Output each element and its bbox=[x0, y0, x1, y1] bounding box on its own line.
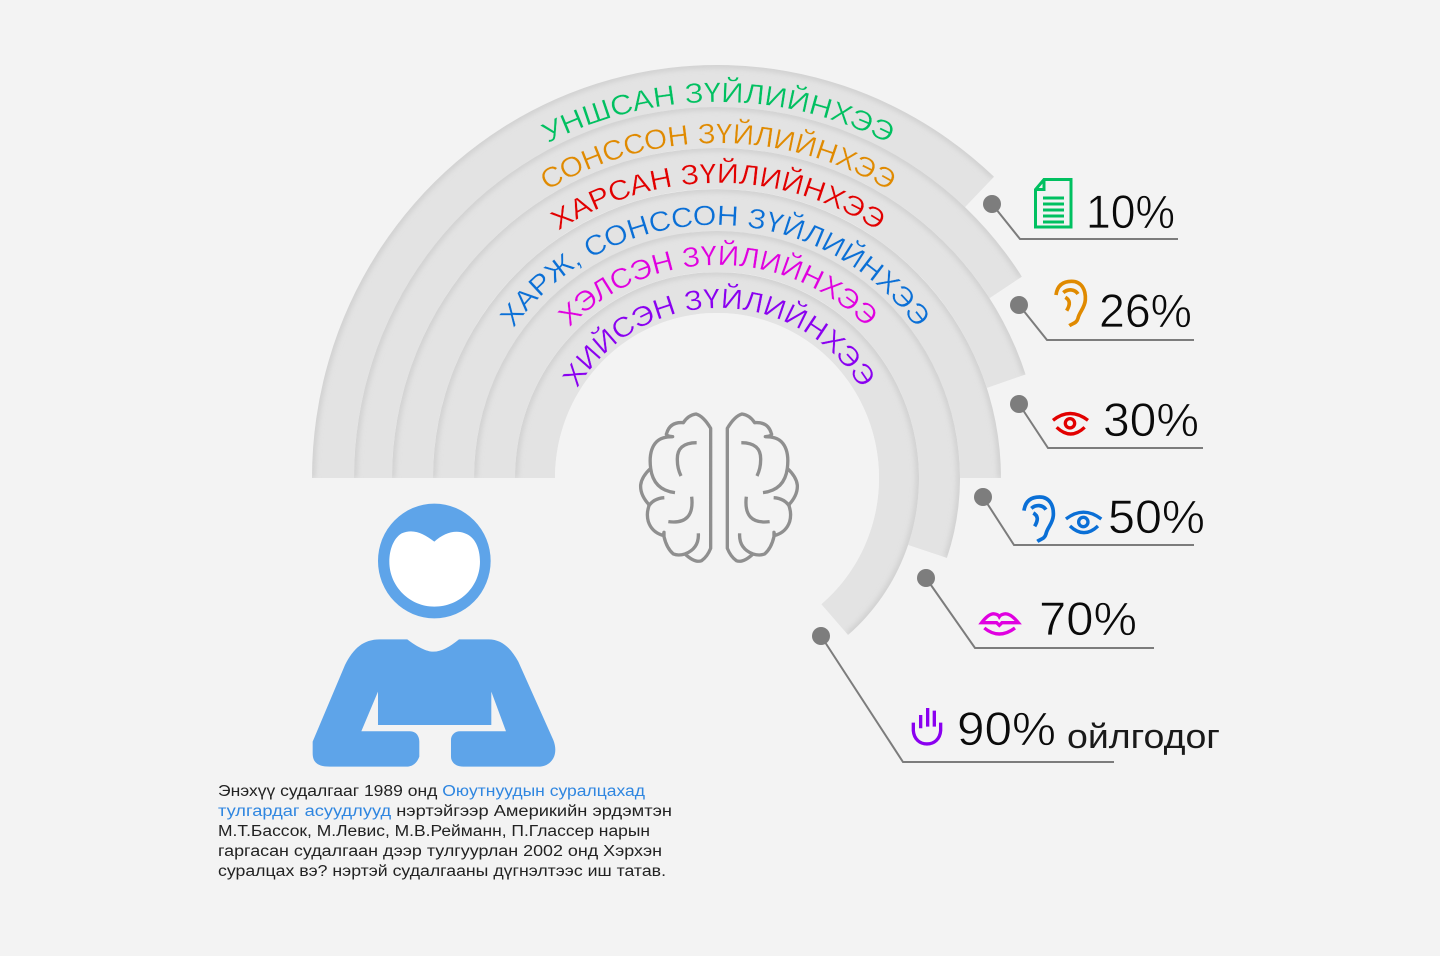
icon: hand bbox=[913, 708, 941, 744]
source paragraph: тулгардаг асуудлууд нэртэйгээр Америкийн эрдэмтэн bbox=[218, 803, 672, 820]
source paragraph: М.Т.Бассок, М.Левис, М.В.Рейманн, П.Глассер нарын bbox=[218, 823, 650, 840]
icon: brain bbox=[641, 414, 797, 561]
value: 30% bbox=[1103, 393, 1199, 446]
callout: 90% done bbox=[812, 627, 1220, 762]
band: seen and heard 50% bbox=[433, 189, 1001, 478]
label: said: ХЭЛСЭН ЗҮЙЛИЙНХЭЭ bbox=[557, 240, 876, 327]
marker dot bbox=[917, 569, 935, 587]
source paragraph: гаргасан судалгаан дээр тулгуурлан 2002 онд Хэрхэн bbox=[218, 843, 662, 860]
icon: eye bbox=[1066, 512, 1101, 533]
callout: 30% seen bbox=[1010, 393, 1203, 448]
face bbox=[389, 531, 480, 607]
value: 90% bbox=[957, 702, 1056, 755]
label: heard: СОНССОН ЗҮЙЛИЙНХЭЭ bbox=[542, 118, 894, 188]
rainbow of concentric retention bands bbox=[312, 65, 1026, 635]
body bbox=[313, 639, 555, 767]
callout: 50% seen and heard bbox=[974, 488, 1205, 545]
icon: student figure bbox=[313, 504, 555, 767]
label: seen and heard: ХАРЖ, СОНССОН ЗҮЙЛИЙНХЭЭ bbox=[499, 206, 928, 328]
value: 10% bbox=[1086, 185, 1175, 238]
label: done: ХИЙСЭН ЗҮЙЛИЙНХЭЭ bbox=[562, 283, 873, 388]
leader line bbox=[983, 497, 1194, 545]
band: heard 26% bbox=[354, 107, 1022, 478]
source paragraph: суралцах вэ? нэртэй судалгааны дүгнэлтээс иш татав. bbox=[218, 863, 666, 880]
icon: document bbox=[1036, 180, 1071, 227]
icon: ear bbox=[1024, 497, 1053, 541]
callout: 70% said bbox=[917, 569, 1154, 648]
band: read 10% bbox=[312, 65, 994, 478]
leader line bbox=[992, 204, 1178, 239]
band: seen 30% bbox=[392, 148, 1026, 478]
band: said 70% bbox=[474, 231, 960, 558]
marker dot bbox=[974, 488, 992, 506]
icon: ear bbox=[1056, 281, 1085, 326]
value: 50% bbox=[1108, 490, 1205, 543]
leader line bbox=[821, 636, 1114, 762]
value: 70% bbox=[1039, 592, 1137, 645]
curved band labels bbox=[499, 76, 928, 388]
icon: eye bbox=[1053, 413, 1088, 434]
marker dot bbox=[983, 195, 1001, 213]
head bbox=[378, 504, 491, 618]
source paragraph bbox=[218, 783, 672, 880]
value suffix: ойлгодог bbox=[1067, 718, 1220, 756]
callout: 26% heard bbox=[1010, 281, 1194, 340]
leader line bbox=[1019, 305, 1194, 340]
label: seen: ХАРСАН ЗҮЙЛИЙНХЭЭ bbox=[550, 158, 884, 230]
leader line bbox=[1019, 404, 1203, 448]
icon: lips bbox=[982, 614, 1018, 634]
band: done 90% bbox=[515, 272, 919, 635]
source paragraph: Энэхүү судалгааг 1989 онд Оюутнуудын суралцахад bbox=[218, 783, 645, 800]
label: read: УНШСАН ЗҮЙЛИЙНХЭЭ bbox=[540, 76, 893, 142]
leader line bbox=[926, 578, 1154, 648]
marker dot bbox=[1010, 296, 1028, 314]
marker dot bbox=[1010, 395, 1028, 413]
marker dot bbox=[812, 627, 830, 645]
value: 26% bbox=[1099, 284, 1192, 337]
callout: 10% read bbox=[983, 180, 1178, 239]
